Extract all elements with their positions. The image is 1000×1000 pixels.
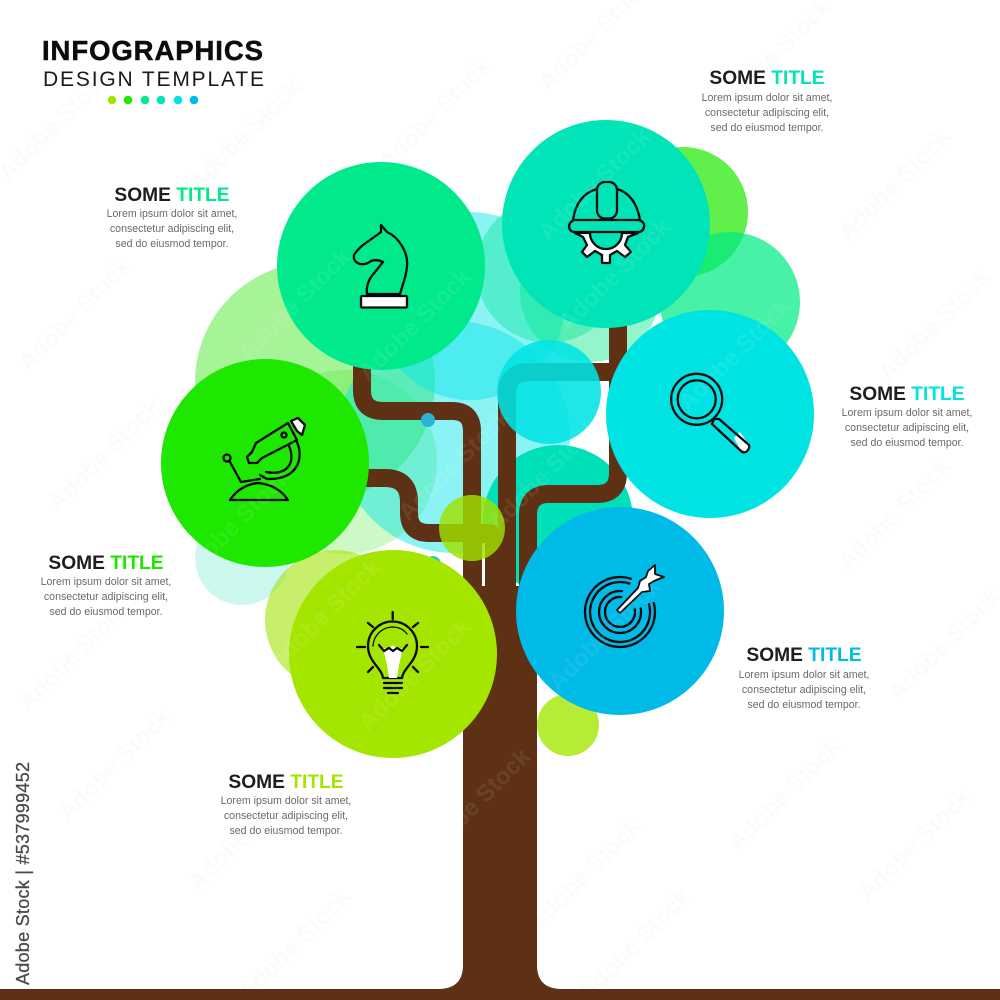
text block: bulb: consectetur adipiscing elit, bbox=[224, 810, 348, 822]
trunk fill below the lower left branch bbox=[480, 536, 502, 590]
text block: helmet bbox=[702, 68, 832, 134]
panel: target bbox=[516, 507, 724, 715]
watermark over shapes: Adobe Stock bbox=[553, 213, 677, 336]
panel: chess strategy bbox=[277, 162, 485, 370]
background circles of the tree crown bbox=[164, 147, 800, 756]
text block: target bbox=[739, 645, 869, 711]
text block: microscope bbox=[41, 553, 171, 618]
text block: magnifier: sed do eiusmod tempor. bbox=[850, 437, 964, 449]
text block: target: consectetur adipiscing elit, bbox=[742, 684, 866, 696]
text block: magnifier: Lorem ipsum dolor sit amet, bbox=[842, 407, 972, 419]
text block: chess bbox=[107, 185, 237, 250]
watermark over shapes: Adobe Stock bbox=[263, 553, 387, 676]
text block: target: SOME TITLE bbox=[746, 645, 862, 666]
panel: microscope bbox=[161, 359, 369, 567]
text block: target: sed do eiusmod tempor. bbox=[747, 699, 861, 711]
panel: magnifier bbox=[606, 310, 814, 518]
text block: target: Lorem ipsum dolor sit amet, bbox=[739, 669, 869, 681]
watermark over shapes: Adobe Stock bbox=[543, 573, 667, 696]
watermark over shapes: Adobe Stock bbox=[533, 123, 657, 246]
text block: chess: sed do eiusmod tempor. bbox=[115, 238, 229, 250]
watermark over shapes: Adobe Stock bbox=[353, 263, 477, 386]
icon: microscope bbox=[224, 418, 305, 500]
watermark over shapes: Adobe Stock bbox=[483, 413, 607, 536]
gap between branch and trunk bbox=[482, 543, 485, 586]
text block: helmet: Lorem ipsum dolor sit amet, bbox=[702, 92, 832, 104]
heading: INFOGRAPHICS bbox=[42, 35, 263, 66]
watermark over shapes: Adobe Stock bbox=[393, 403, 517, 526]
text block: bulb: SOME TITLE bbox=[228, 772, 344, 793]
text block: magnifier bbox=[842, 384, 972, 449]
text block: bulb bbox=[221, 772, 351, 837]
watermark over shapes: Adobe Stock bbox=[413, 743, 537, 866]
panel: helmet and gear bbox=[502, 120, 710, 328]
text block: microscope: SOME TITLE bbox=[48, 553, 164, 574]
icon: magnifying glass bbox=[671, 374, 749, 452]
text block: magnifier: SOME TITLE bbox=[849, 384, 965, 405]
icon: target with arrow bbox=[585, 565, 664, 647]
watermark over shapes: Adobe Stock bbox=[353, 613, 477, 736]
text block: chess: consectetur adipiscing elit, bbox=[110, 223, 234, 235]
text block: chess: Lorem ipsum dolor sit amet, bbox=[107, 208, 237, 220]
watermark over shapes bbox=[173, 123, 797, 866]
heading: DESIGN TEMPLATE bbox=[43, 68, 264, 91]
heading dots bbox=[108, 96, 198, 104]
text block: bulb: Lorem ipsum dolor sit amet, bbox=[221, 795, 351, 807]
text block: magnifier: consectetur adipiscing elit, bbox=[845, 422, 969, 434]
small overlay circles bbox=[421, 340, 601, 561]
watermark over shapes: Adobe Stock bbox=[673, 293, 797, 416]
watermark over shapes: Adobe Stock bbox=[233, 243, 357, 366]
tree branches bbox=[360, 320, 618, 600]
watermark over shapes: Adobe Stock bbox=[173, 463, 297, 586]
icon: chess knight bbox=[354, 225, 407, 308]
stock id side label: Adobe Stock | #537999452 bbox=[13, 762, 33, 985]
tree trunk and ground bbox=[0, 586, 1000, 1000]
icon: light bulb bbox=[357, 612, 428, 693]
text block: microscope: Lorem ipsum dolor sit amet, bbox=[41, 576, 171, 588]
text block: bulb: sed do eiusmod tempor. bbox=[229, 825, 343, 837]
text block: microscope: consectetur adipiscing elit, bbox=[44, 591, 168, 603]
text block: helmet: SOME TITLE bbox=[709, 68, 825, 89]
text block: helmet: sed do eiusmod tempor. bbox=[710, 122, 824, 134]
panel: light bulb bbox=[289, 550, 497, 758]
text block: microscope: sed do eiusmod tempor. bbox=[49, 606, 163, 618]
heading bbox=[42, 35, 264, 104]
text block: helmet: consectetur adipiscing elit, bbox=[705, 107, 829, 119]
text block: chess: SOME TITLE bbox=[114, 185, 230, 206]
icon: helmet with gear bbox=[569, 182, 644, 263]
